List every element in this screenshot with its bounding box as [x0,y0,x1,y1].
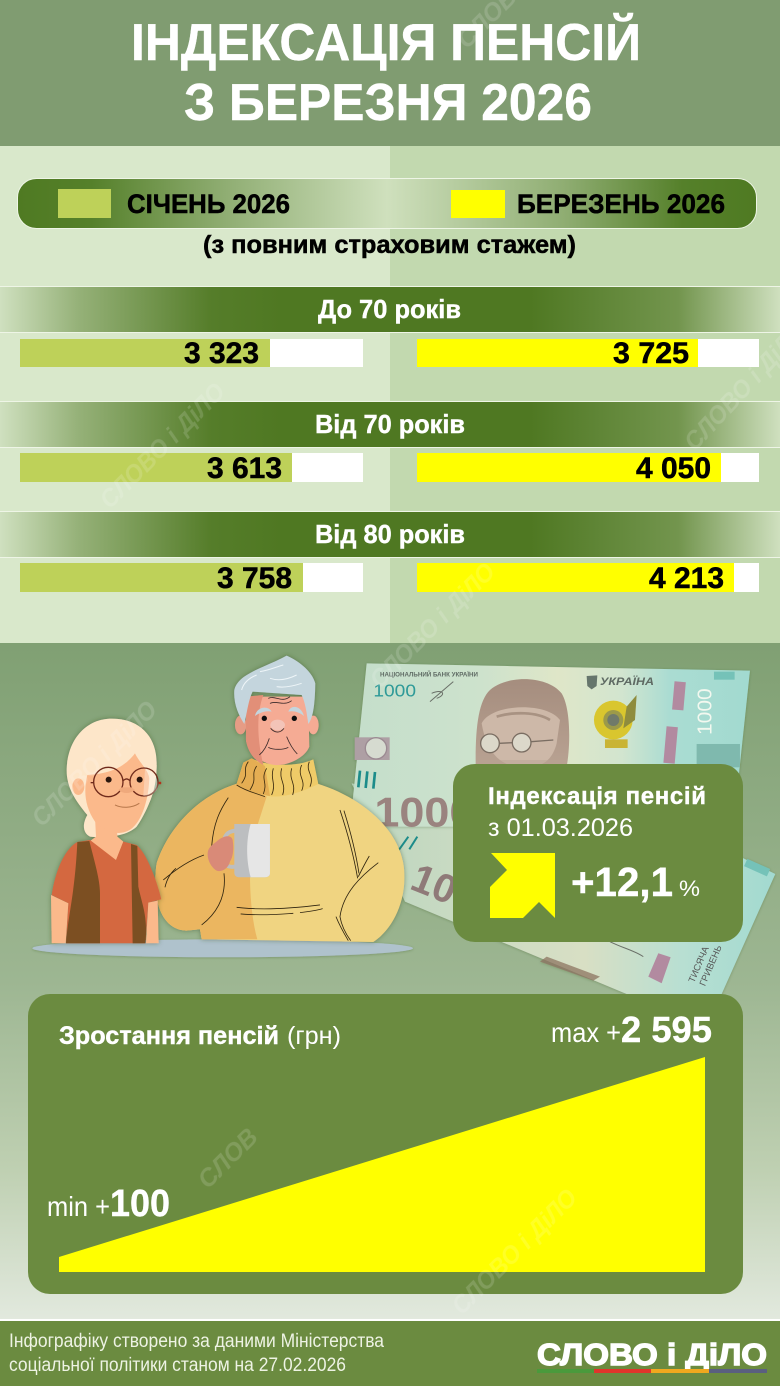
hair [234,656,315,724]
lower banknote: 100 [405,856,483,922]
growth wedge [59,1057,705,1272]
bar: march: 3 725 [613,337,689,370]
min label [47,1183,170,1225]
group: from 70 [0,401,780,485]
group: from 80: Від 80 років [315,519,465,549]
lower banknote: ТИСЯЧА [687,944,711,984]
bar: march: 4 213 [649,562,724,595]
logo: СЛОВО і ДіЛО [537,1337,767,1372]
bar: january [20,337,363,370]
brows and eyes [255,708,272,716]
source note: соціальної політики станом на 27.02.2026 [9,1355,346,1376]
title [131,13,641,132]
pension growth panel [28,994,743,1294]
man [155,656,404,942]
portrait [476,679,569,797]
table [32,939,413,957]
watermarks: СЛОВО і ДіЛО [364,557,501,694]
upper banknote: УКРАЇНА [600,675,654,688]
illustration: pensioners [32,656,413,957]
glasses and features [91,767,158,797]
bar: january [20,452,363,485]
vest [66,841,100,943]
source note [9,1331,384,1376]
group: from 80 [0,511,780,595]
face [85,753,149,833]
min label: min + [47,1191,110,1222]
arms [51,895,68,943]
woman [51,719,161,943]
callout date: з 01.03.2026 [488,814,633,842]
watermarks: СЛОВО і ДіЛО [26,695,163,832]
legend [18,178,756,228]
hair [67,719,157,837]
neck [89,817,123,861]
group: up to 70 [0,286,780,370]
bar: january: 3 613 [207,452,282,485]
bar: march [417,452,759,485]
upper banknote: НАЦІОНАЛЬНИЙ БАНК УКРАЇНИ [380,670,478,679]
watermarks: СЛОВ [192,1123,264,1194]
watermarks: СЛОВО і ДіЛО [94,377,231,514]
legend: СІЧЕНЬ 2026 [127,189,290,219]
callout percentage: % [679,876,700,901]
upper banknote [350,663,750,836]
page background [0,643,780,1320]
title: З БЕРЕЗНЯ 2026 [184,74,592,132]
hand [208,836,233,871]
bar: march [417,337,759,370]
header [0,0,780,146]
bar: january: 3 758 [217,562,292,595]
max label: max + [551,1017,621,1048]
shirt [52,840,161,943]
watermarks: СЛОВО і ДіЛО [446,1183,583,1320]
max label: 2 595 [621,1009,712,1050]
collar [237,758,318,797]
title: ІНДЕКСАЦІЯ ПЕНСІЙ [131,13,641,72]
upper banknote: 1000 [373,681,416,701]
ears [235,716,246,734]
source note: Інфографіку створено за даними Міністерства [9,1331,384,1352]
banknotes [350,663,775,994]
indexation callout [453,764,743,942]
bar: january [20,562,363,595]
footer [0,1319,780,1386]
mug [224,824,270,877]
heading: Зростання пенсій [59,1022,279,1050]
group: up to 70: До 70 років [318,294,461,324]
comparison panel [0,146,780,643]
emblem [594,695,637,748]
min label: 100 [110,1183,170,1225]
lower banknote: ГРИВЕНЬ [698,944,724,987]
callout heading: Індексація пенсій [488,783,706,810]
callout percentage: +12,1 [571,859,673,905]
upper banknote: 1000 [374,789,474,836]
face [246,697,309,765]
max label [551,1009,712,1050]
bar: march: 4 050 [636,452,711,485]
heading: (грн) [287,1022,341,1050]
bar: march [417,562,759,595]
icon: up arrow [490,853,555,918]
upper banknote: 1000 [694,688,717,735]
legend: БЕРЕЗЕНЬ 2026 [517,189,725,219]
sweater creases [163,798,378,941]
group: from 70: Від 70 років [315,409,465,439]
subtitle: (з повним страховим стажем) [203,231,576,259]
bar: january: 3 323 [184,337,259,370]
lower banknote [352,783,775,994]
